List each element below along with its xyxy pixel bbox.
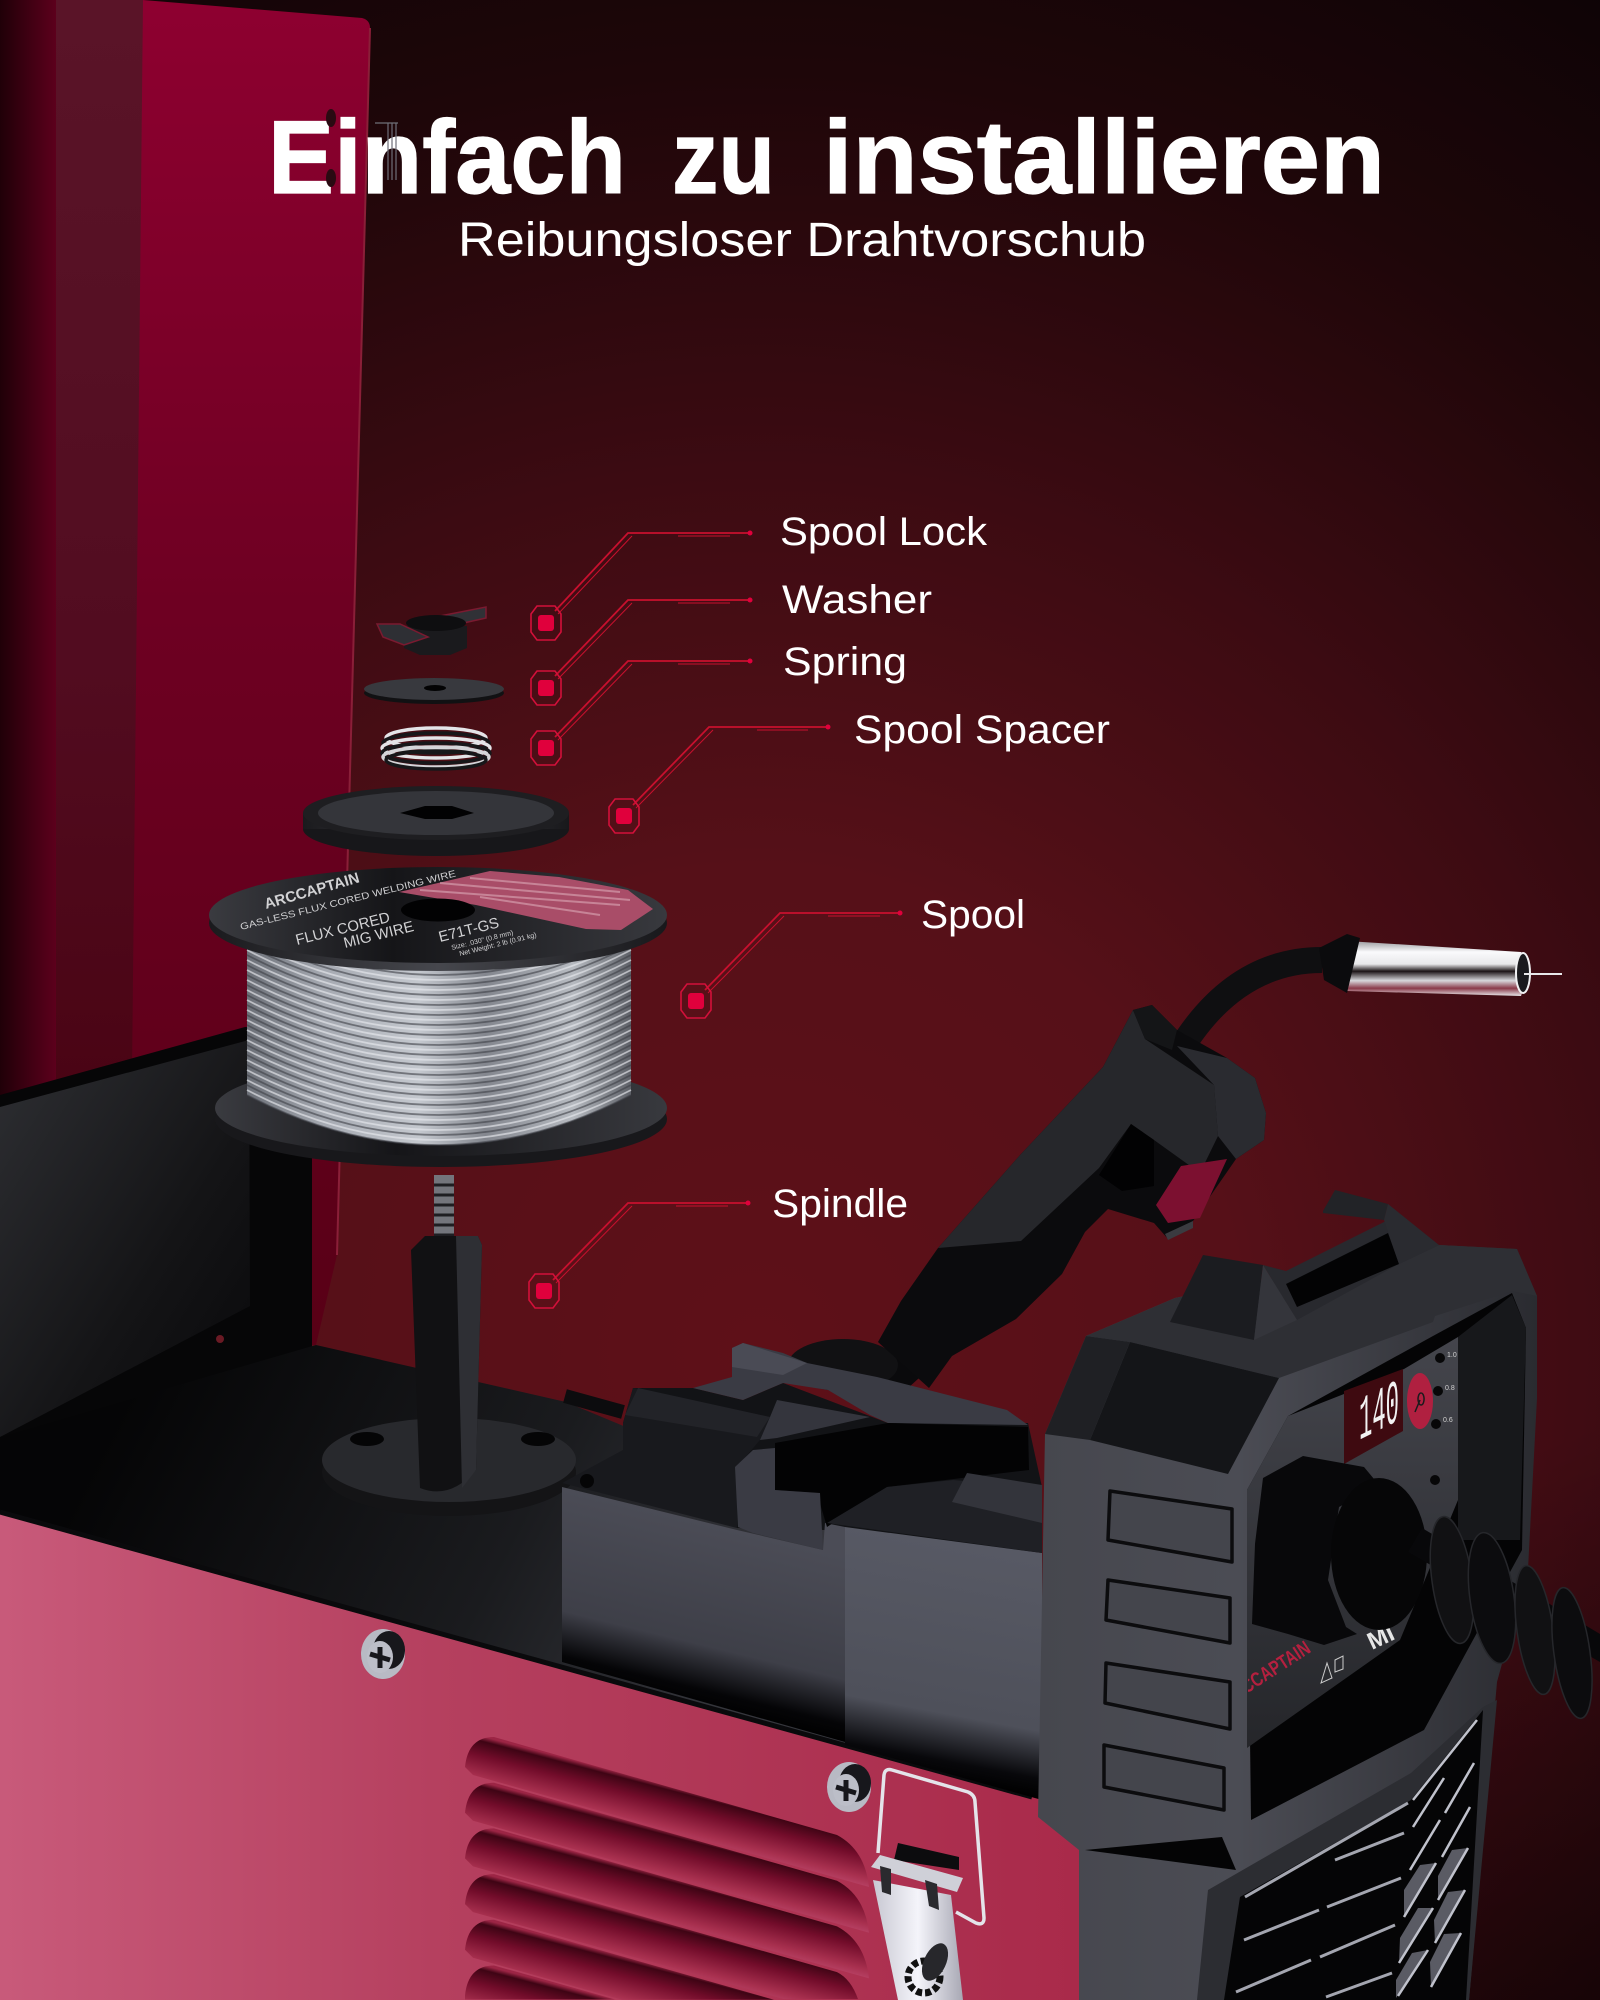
subtitle: Reibungsloser Drahtvorschub [458,214,1146,267]
panel: machine interior wall [0,1027,312,1440]
spool printing: Net Weight: 2 lb (0.91 kg) [459,932,537,958]
callout: Spool: Spool [921,893,1025,937]
brand text [1248,1628,1395,1692]
indicator lights [1430,1352,1457,1485]
title overlay marks [326,109,398,187]
spool label: pink safety panel [399,871,653,930]
spool [209,867,667,1167]
mechanism housing right [845,1527,1042,1800]
welder body: 140 [1359,1368,1399,1459]
spool lock [377,607,486,655]
torch cable [1180,960,1322,1050]
spool printing: Size: .030" (0.8 mm) [451,930,514,952]
torch trigger [1156,1159,1227,1223]
welder control panel [1247,1337,1458,1748]
mechanism housing left [562,1487,845,1742]
callout: Spool Lock: Spool Lock [780,510,988,554]
welder corner cap [1090,1342,1279,1474]
mechanism right deck [827,1480,1042,1553]
callout: Spool Lock [531,510,988,640]
torch neck and joint [788,1318,955,1391]
grip ribs [1104,1491,1232,1810]
torch opening [1099,1124,1154,1191]
callout: Spool Spacer [609,708,1110,833]
indicator lights: 1.0 [1447,1352,1457,1359]
callout: Spool Spacer: Spool Spacer [854,708,1110,752]
spool printing: GAS-LESS FLUX CORED WELDING WIRE [239,869,457,933]
mechanism shadow block [775,1423,1029,1527]
spool hub hole [401,898,475,922]
wire drum [247,905,631,1145]
callout: Spindle: Spindle [772,1182,908,1226]
welder front recess [1247,1293,1526,1820]
torch rear cap [1177,1046,1266,1159]
mechanism top plate [693,1343,1028,1425]
washer [364,678,504,704]
wire windings [247,910,631,1145]
mechanism pin [565,1396,623,1412]
title: zu [672,100,775,216]
spool printing: MIG WIRE [342,918,416,952]
callout: Washer: Washer [782,578,932,622]
spool spacer [303,786,569,856]
feed mechanism [562,1343,1042,1800]
lower seam [1085,1837,1236,1870]
mechanism deck [562,1388,770,1528]
spool printing: ARCCAPTAIN [262,869,361,913]
panel: red front cover [0,1512,1079,2000]
torch upper shell [938,1010,1218,1248]
spindle [322,1175,576,1516]
callout: Washer [531,578,932,705]
rear vents [1197,1700,1497,2000]
welder top face [1086,1245,1537,1378]
mechanism base [623,1383,1042,1553]
brand text: ARCCAPTAIN [1219,1637,1315,1710]
spool top flange [209,867,667,971]
indicator lights: 0.8 [1445,1385,1455,1392]
MIG torch [788,934,1562,1391]
panel: open red lid [0,0,370,1345]
torch handle [878,1005,1266,1388]
vent louvers [465,1737,869,2000]
mechanism roller [735,1448,823,1550]
spool printing [239,869,537,958]
welder handle [1170,1190,1439,1340]
indicator lights: 0.6 [1443,1417,1453,1424]
callout: Spring [531,640,907,765]
spring [382,728,490,769]
spool bottom flange [215,1060,667,1167]
digital display [1344,1368,1403,1464]
mechanism cylinder [625,1388,770,1437]
title: installieren [823,100,1385,216]
welder body [1038,1190,1600,2000]
welder housing [1038,1245,1537,2000]
spool printing: E71T-GS [437,914,501,946]
cable connector [1252,1456,1600,1721]
title: Einfach [268,100,626,216]
screw: left [361,1629,405,1679]
brand text: MI [1363,1620,1399,1655]
torch nozzle [1319,934,1562,996]
knob [1407,1373,1433,1429]
callout: Spool [681,893,1025,1018]
callout: Spring: Spring [783,640,907,684]
latch [871,1770,984,2000]
screw: right [827,1762,871,1812]
panel: machine floor [0,1345,1040,1800]
spool printing: FLUX CORED [294,909,392,949]
callout: Spindle [529,1182,908,1308]
